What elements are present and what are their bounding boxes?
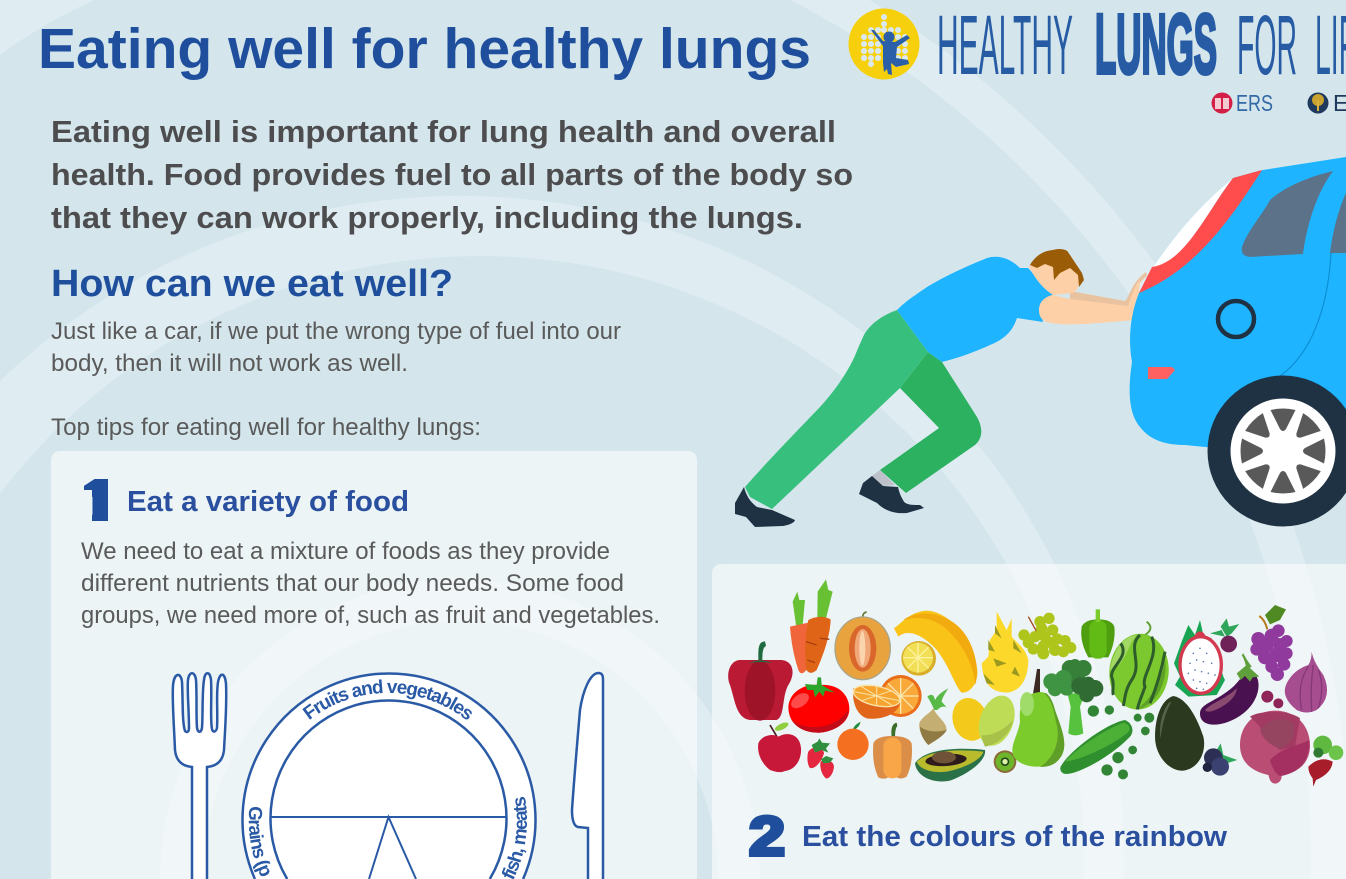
broccoli [1043, 659, 1103, 735]
orange slices [852, 675, 922, 719]
fruit and vegetable rainbow, green and purple colours [1018, 605, 1343, 787]
eggplant [1200, 653, 1259, 725]
head [1029, 258, 1079, 295]
panel 2 heading: Eat the colours of the rainbow [802, 821, 1227, 853]
onion [919, 688, 948, 745]
heading: how can we eat well: How can we eat well? [51, 263, 453, 305]
fruit and vegetable rainbow, warm colours [728, 579, 1028, 781]
plate label: fruits and vegetables: Fruits and vegetables [302, 679, 472, 720]
body text: car analogy: body, then it will not work as well. [51, 350, 408, 377]
logo: ERS: ERS [1236, 90, 1273, 116]
red onion [1285, 652, 1327, 712]
red dragon fruit [1174, 620, 1225, 697]
panel 1: eat a variety of food [51, 451, 697, 879]
number 2: 2 [749, 805, 785, 867]
green grapes [1018, 613, 1076, 659]
dark avocado [1155, 696, 1204, 771]
panel 2: eat the colours of the rainbow [712, 564, 1346, 879]
body text: car analogy: Just like a car, if we put the wrong type of fuel into our [51, 318, 621, 345]
windshield white [1153, 178, 1233, 267]
sock [872, 470, 895, 486]
green pepper [1081, 609, 1115, 659]
icon: knife [572, 673, 603, 879]
title: Eating well for healthy lungs [38, 17, 811, 81]
lemon and lime [948, 691, 1021, 751]
apple [758, 721, 801, 772]
yellow dragon fruit [982, 612, 1028, 693]
orange pepper [873, 723, 912, 779]
banana [894, 611, 977, 693]
tail light [1148, 367, 1175, 379]
body text: car analogy [51, 318, 621, 377]
panel 1 body text [81, 538, 660, 629]
lemon slice [901, 641, 936, 676]
illustration: man pushing [735, 249, 1147, 527]
fuel cap ring [1218, 301, 1254, 337]
radish with leaves [1210, 618, 1239, 652]
intro text: Eating well is important for lung health and overall [51, 114, 836, 149]
text: top tips intro: Top tips for eating well for healthy lungs: [51, 414, 481, 441]
beetroot [1308, 736, 1343, 787]
intro text: health. Food provides fuel to all parts of the body so [51, 157, 853, 192]
icon: fork [173, 673, 226, 879]
panel 1 body text: different nutrients that our body needs. Some food [81, 570, 624, 597]
windshield red strip [1139, 170, 1262, 293]
illustration: blue car [1130, 157, 1346, 526]
strawberries [807, 738, 834, 778]
red cabbage [1240, 711, 1310, 784]
car body [1130, 157, 1346, 480]
panel 1 body text: We need to eat a mixture of foods as they provide [81, 538, 610, 565]
logo: ERS [1212, 90, 1273, 116]
logo wordmark: HEALTHY [937, 0, 1073, 92]
back leg [880, 352, 981, 493]
panel 1 heading: Eat a variety of food [127, 486, 409, 518]
arm [1039, 280, 1140, 324]
back arm [1070, 272, 1147, 310]
second window [1330, 193, 1346, 253]
small orange [837, 722, 869, 760]
window [1242, 171, 1333, 257]
tomato [788, 677, 849, 733]
intro text [51, 114, 853, 235]
avocado half [915, 749, 985, 781]
cucumber [1060, 720, 1132, 774]
red pepper [728, 641, 793, 721]
number 1: 1 [82, 470, 116, 539]
plate diagram [241, 672, 537, 879]
wheel [1208, 376, 1346, 526]
pear [1012, 669, 1064, 767]
panel 1 body text: groups, we need more of, such as fruit and vegetables. [81, 602, 660, 629]
shirt [897, 257, 1053, 362]
shoe: front foot [735, 487, 795, 527]
shoe: back foot [859, 476, 924, 513]
plate label: grains: Grains (p [248, 807, 270, 876]
purple grapes [1250, 605, 1293, 681]
watermelon [1106, 622, 1172, 712]
logo: Healthy Lungs for Life [848, 0, 1346, 116]
melon [835, 612, 890, 680]
blueberries [1203, 743, 1237, 776]
front leg [745, 310, 928, 509]
small berries [1261, 691, 1283, 708]
intro text: that they can work properly, including the lungs. [51, 200, 803, 235]
peas [1088, 705, 1154, 779]
kiwi [994, 750, 1016, 773]
door line [1280, 253, 1331, 376]
icon: yellow lung badge [848, 8, 920, 80]
logo: ELF [1308, 90, 1346, 116]
carrots [790, 579, 833, 673]
hair [1030, 249, 1084, 287]
